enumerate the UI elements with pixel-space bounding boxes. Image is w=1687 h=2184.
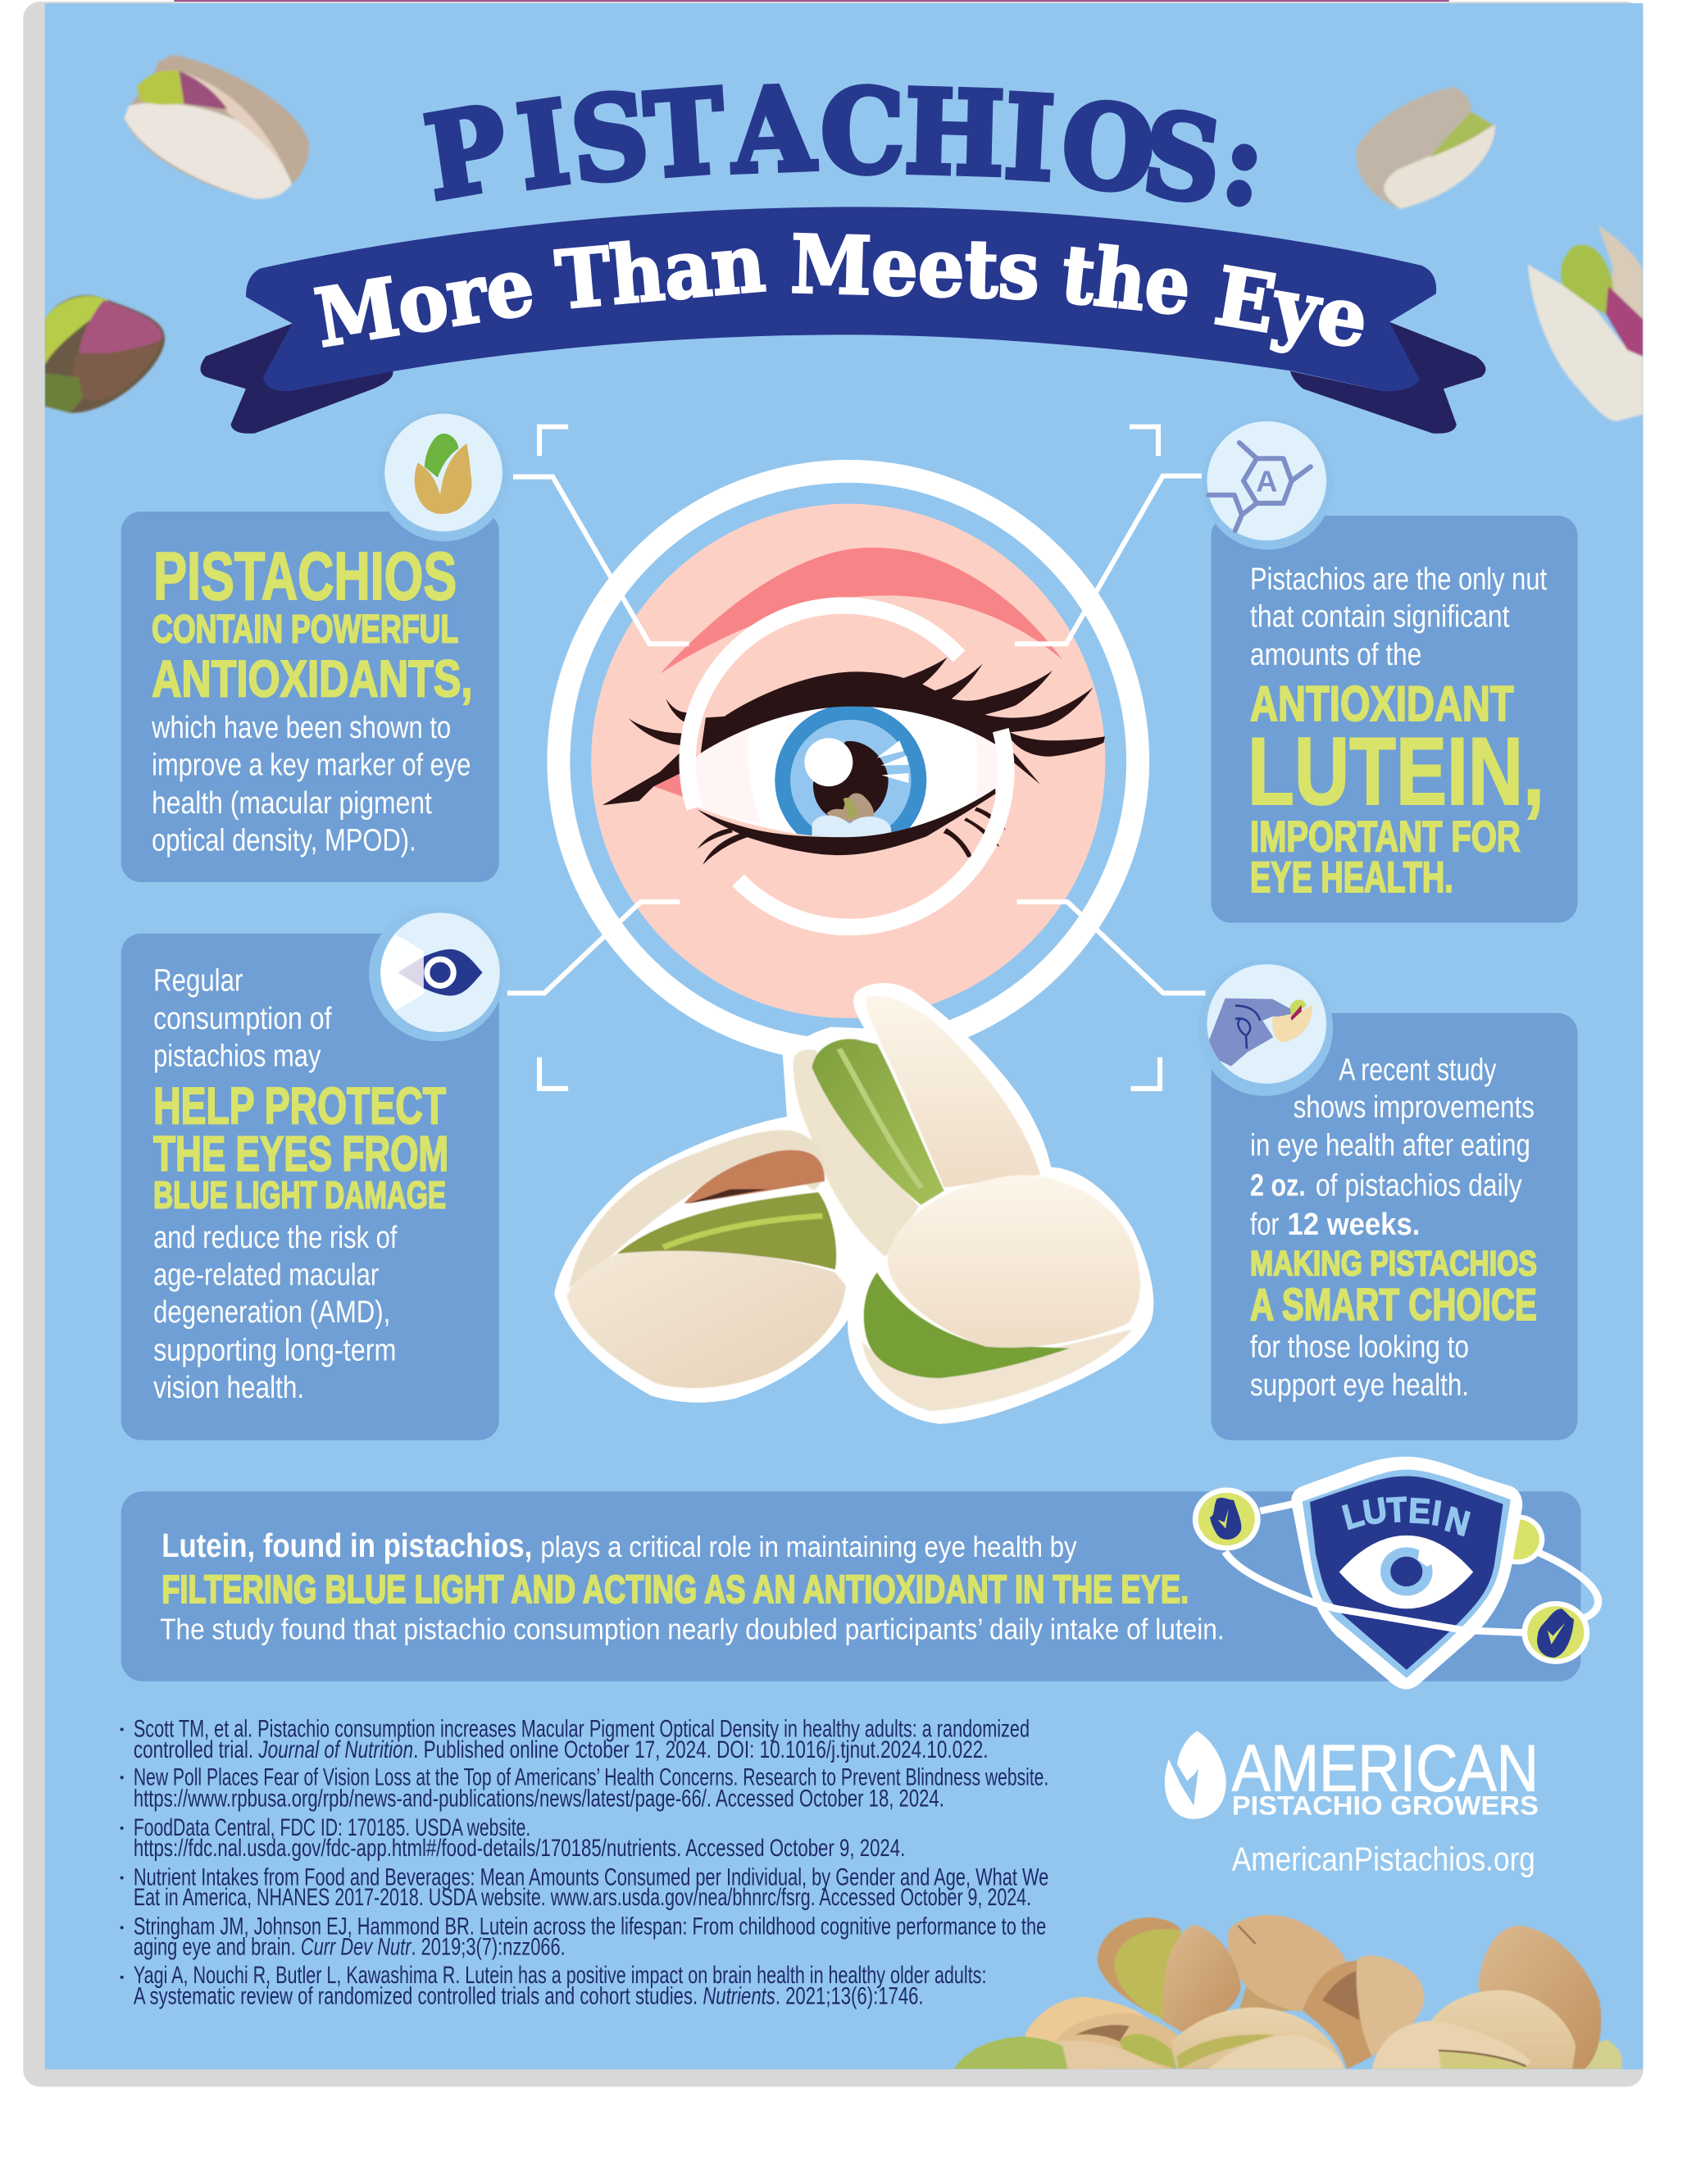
references list: A systematic review of randomized controlled trials and cohort studies. Nutrients. 2021;13(6):1746. <box>134 1982 924 2009</box>
heading: smart choice: MAKING PISTACHIOS <box>1250 1244 1537 1282</box>
white outlines <box>554 983 1153 1424</box>
heading: help protect: HELP PROTECT <box>153 1077 446 1135</box>
references list <box>120 1716 1048 2009</box>
lutein shield badge <box>1193 1457 1598 1689</box>
closing sentence: The study found that pistachio consumption nearly doubled participants’ daily intake of lutein. <box>160 1612 1225 1645</box>
heading: pistachios contain powerful antioxidants <box>152 538 472 708</box>
heading: filtering blue light: FILTERING BLUE LIGHT AND ACTING AS AN ANTIOXIDANT IN THE EYE. <box>161 1567 1189 1612</box>
body intro <box>1250 562 1547 672</box>
references list: New Poll Places Fear of Vision Loss at the Top of Americans’ Health Concerns. Research to Prevent Blindness website. <box>134 1763 1048 1790</box>
references list: Yagi A, Nouchi R, Butler L, Kawashima R. Lutein has a positive impact on brain health in healthy older adults: <box>134 1962 986 1989</box>
references list: Eat in America, NHANES 2017-2018. USDA website. www.ars.usda.gov/nea/bhnrc/fsrg. Accessed October 9, 2024. <box>134 1884 1031 1911</box>
heading: antioxidant lutein: ANTIOXIDANT <box>1250 676 1514 731</box>
title: PISTACHIOS: <box>418 61 1272 233</box>
logo wordmark: AMERICAN <box>1232 1731 1539 1805</box>
panel: antioxidants <box>121 411 509 882</box>
body text: and reduce the risk of <box>153 1220 398 1255</box>
nut: left <box>567 1131 846 1388</box>
references list: Stringham JM, Johnson EJ, Hammond BR. Lutein across the lifespan: From childhood cognitive performance to the <box>134 1913 1046 1940</box>
logo: American Pistachio Growers <box>1165 1731 1539 1821</box>
references list: Scott TM, et al. Pistachio consumption increases Macular Pigment Optical Density in healthy adults: a randomized <box>134 1716 1030 1743</box>
body intro: that contain significant <box>1250 599 1510 635</box>
heading: help protect: THE EYES FROM <box>153 1126 448 1181</box>
body text: optical density, MPOD). <box>152 823 416 858</box>
body intro: amounts of the <box>1250 637 1421 672</box>
banner subtitle <box>309 216 1375 366</box>
nut: lower right <box>862 1175 1140 1411</box>
banner ribbon <box>201 207 1485 434</box>
back nuts <box>1021 1997 1149 2070</box>
body text: shows improvements <box>1294 1090 1535 1125</box>
banner subtitle: Eye <box>1209 249 1375 366</box>
shield <box>1291 1457 1522 1689</box>
closing text <box>1250 1329 1469 1403</box>
yellow node: left <box>1193 1488 1261 1550</box>
body text: of pistachios daily <box>1316 1167 1522 1203</box>
body text: 12 weeks. <box>1288 1207 1420 1242</box>
body text: which have been shown to <box>151 710 451 745</box>
body intro: pistachios may <box>153 1038 321 1073</box>
right nuts <box>1431 1990 1576 2069</box>
body intro: Pistachios are the only nut <box>1250 562 1547 597</box>
inner ring arcs <box>688 606 1006 927</box>
body text: in eye health after eating <box>1250 1128 1530 1163</box>
closing text: support eye health. <box>1250 1367 1469 1403</box>
connector lines <box>507 475 1205 993</box>
body intro: consumption of <box>153 1001 332 1036</box>
big left nut <box>1098 1918 1181 2018</box>
panel: lutein summary <box>121 1491 1581 1681</box>
heading: pistachios contain powerful antioxidants: ANTIOXIDANTS, <box>152 650 472 708</box>
references list: Nutrient Intakes from Food and Beverages: Mean Amounts Consumed per Individual, by Gender and Age, What We <box>134 1864 1048 1891</box>
body text: for <box>1250 1207 1280 1242</box>
yellow node: lower right <box>1521 1601 1589 1664</box>
middle open nut <box>1303 1960 1372 2069</box>
banner subtitle: More <box>309 239 540 365</box>
corner brackets <box>539 427 1160 1089</box>
body text: A recent study <box>1339 1053 1497 1088</box>
logo wordmark: PISTACHIO GROWERS <box>1232 1791 1539 1821</box>
central eye graphic <box>507 427 1205 1089</box>
orbit back <box>1260 1504 1598 1618</box>
heading: antioxidant lutein: IMPORTANT FOR <box>1250 813 1521 862</box>
pistachio trio <box>554 983 1153 1424</box>
body text <box>153 1220 398 1405</box>
heading: antioxidant lutein: LUTEIN, <box>1248 717 1544 825</box>
heading: antioxidant lutein: EYE HEALTH. <box>1250 853 1453 902</box>
references list: aging eye and brain. Curr Dev Nutr. 2019;3(7):nzz066. <box>134 1934 566 1961</box>
body text: 2 oz. <box>1250 1167 1306 1203</box>
body text: degeneration (AMD), <box>153 1294 390 1330</box>
pistachio: top left <box>125 55 309 199</box>
heading: antioxidant lutein <box>1248 676 1544 902</box>
eye white and iris <box>695 707 1015 838</box>
body text: age-related macular <box>153 1257 379 1292</box>
orbit front <box>1225 1552 1524 1632</box>
body intro <box>153 962 332 1073</box>
panel: recent study <box>1197 960 1577 1440</box>
eyelashes and liner <box>602 657 1105 865</box>
tear duct <box>653 771 687 798</box>
eyebrow <box>660 548 1062 674</box>
pistachio: right edge <box>1528 225 1643 421</box>
website: AmericanPistachios.org <box>1232 1840 1535 1877</box>
heading: smart choice: A SMART CHOICE <box>1250 1280 1537 1330</box>
pistachio: top right <box>1356 87 1495 209</box>
icon: leaf check mark <box>1165 1731 1226 1819</box>
closing text: for those looking to <box>1250 1329 1469 1364</box>
shield label: LUTEIN <box>1339 1490 1474 1544</box>
banner subtitle: the <box>1057 227 1195 333</box>
pistachio: left edge <box>45 295 165 413</box>
heading: pistachios contain powerful antioxidants: CONTAIN POWERFUL <box>152 607 458 652</box>
front centre nut <box>1171 2008 1344 2069</box>
panel: blue light protection <box>121 905 505 1440</box>
heading: help protect: BLUE LIGHT DAMAGE <box>153 1173 446 1216</box>
nut: upper standing <box>793 996 1040 1257</box>
pistachio pile <box>954 1915 1622 2070</box>
icon: hand holding pistachio <box>1207 964 1326 1084</box>
heading: help protect <box>153 1077 448 1216</box>
body text: supporting long-term <box>153 1333 396 1368</box>
banner subtitle: Meets <box>789 217 1040 317</box>
references list: https://www.rpbusa.org/rpb/news-and-publications/news/latest/page-66/. Accessed October 18, 2024. <box>134 1786 944 1813</box>
lead sentence: plays a critical role in maintaining eye health by <box>540 1530 1077 1563</box>
body intro: Regular <box>153 962 243 998</box>
yellow node: right middle <box>1491 1514 1544 1564</box>
body text <box>151 710 471 858</box>
references list: https://fdc.nal.usda.gov/fdc-app.html#/food-details/170185/nutrients. Accessed October 9, 2024. <box>134 1835 905 1862</box>
icon: pistachio check <box>384 414 502 531</box>
heading: pistachios contain powerful antioxidants: PISTACHIOS <box>153 538 457 614</box>
panel: lutein <box>1202 419 1577 923</box>
banner subtitle: Than <box>552 216 769 327</box>
lead sentence <box>161 1527 1077 1564</box>
magnifier ring and skin disc <box>558 471 1138 1051</box>
heading: smart choice <box>1250 1244 1537 1330</box>
body text: improve a key marker of eye <box>152 748 471 783</box>
references list: controlled trial. Journal of Nutrition. Published online October 17, 2024. DOI: 10.1016/j.tjnut.2024.10.022. <box>134 1736 988 1763</box>
body text <box>1250 1053 1535 1242</box>
references list: FoodData Central, FDC ID: 170185. USDA website. <box>134 1814 530 1841</box>
body text: health (macular pigment <box>152 785 432 821</box>
front left nuts <box>1055 2013 1181 2069</box>
icon: molecule <box>1207 421 1326 540</box>
body text: vision health. <box>153 1370 304 1405</box>
icon: eye with light beam <box>380 912 500 1032</box>
icon: molecule: A <box>1256 465 1277 498</box>
lead sentence: Lutein, found in pistachios, <box>161 1527 532 1564</box>
